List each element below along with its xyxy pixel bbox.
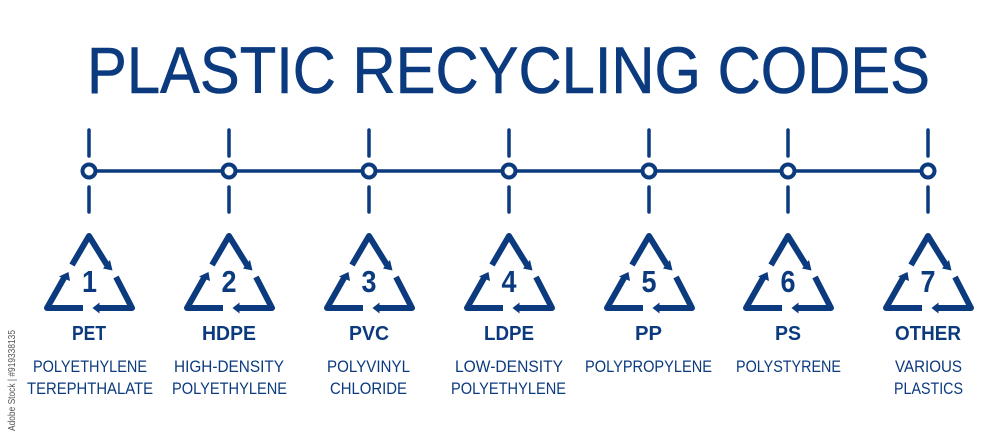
icon: recycling triangle 2: 2 bbox=[222, 264, 236, 299]
title: PLASTIC RECYCLING CODES bbox=[87, 33, 930, 107]
icon: recycling triangle 7 bbox=[886, 236, 971, 314]
item 3: PVC bbox=[327, 236, 412, 398]
icon: recycling triangle 5: 5 bbox=[642, 264, 656, 299]
icon: recycling triangle 1 bbox=[47, 236, 132, 314]
icon: recycling triangle 7: 7 bbox=[920, 264, 935, 299]
item 1: PET bbox=[27, 236, 153, 398]
description: polystyrene: POLYSTYRENE bbox=[736, 358, 841, 376]
label: PET: PET bbox=[72, 323, 106, 345]
item 6: PS bbox=[736, 236, 841, 376]
description: various plastics bbox=[894, 358, 963, 398]
label: PP: PP bbox=[635, 323, 662, 345]
description: polyethylene terephthalate bbox=[27, 358, 153, 398]
label: LDPE: LDPE bbox=[484, 323, 534, 345]
description: polyethylene terephthalate: TEREPHTHALATE bbox=[27, 380, 153, 398]
icon: recycling triangle 6: 6 bbox=[780, 264, 795, 299]
description: various plastics: PLASTICS bbox=[894, 380, 963, 398]
label: HDPE: HDPE bbox=[202, 323, 256, 345]
description: high-density polyethylene: HIGH-DENSITY bbox=[174, 358, 284, 376]
watermark credit: Adobe Stock | #919338135 bbox=[6, 330, 18, 431]
item 7: OTHER bbox=[886, 236, 971, 398]
description: low-density polyethylene bbox=[451, 358, 566, 398]
icon: recycling triangle 3: 3 bbox=[362, 264, 376, 299]
label: PVC: PVC bbox=[349, 323, 389, 345]
description: high-density polyethylene bbox=[172, 358, 287, 398]
description: polyvinyl chloride: POLYVINYL bbox=[327, 358, 410, 376]
description: high-density polyethylene: POLYETHYLENE bbox=[172, 380, 287, 398]
item 5: PP bbox=[585, 236, 712, 376]
description: polyvinyl chloride: CHLORIDE bbox=[330, 380, 407, 398]
description: polypropylene: POLYPROPYLENE bbox=[585, 358, 712, 376]
description: polyethylene terephthalate: POLYETHYLENE bbox=[33, 358, 147, 376]
icon: recycling triangle 3 bbox=[327, 236, 412, 314]
icon: recycling triangle 4 bbox=[467, 236, 552, 314]
item 4: LDPE bbox=[451, 236, 566, 398]
description: low-density polyethylene: POLYETHYLENE bbox=[451, 380, 566, 398]
item 2: HDPE bbox=[172, 236, 287, 398]
timeline bbox=[82, 130, 934, 212]
description: low-density polyethylene: LOW-DENSITY bbox=[455, 358, 563, 376]
icon: recycling triangle 4: 4 bbox=[502, 264, 517, 299]
description: polyvinyl chloride bbox=[327, 358, 410, 398]
label: OTHER: OTHER bbox=[895, 323, 962, 345]
icon: recycling triangle 2 bbox=[187, 236, 272, 314]
description: various plastics: VARIOUS bbox=[895, 358, 962, 376]
label: PS: PS bbox=[775, 323, 801, 345]
icon: recycling triangle 1: 1 bbox=[82, 264, 97, 299]
